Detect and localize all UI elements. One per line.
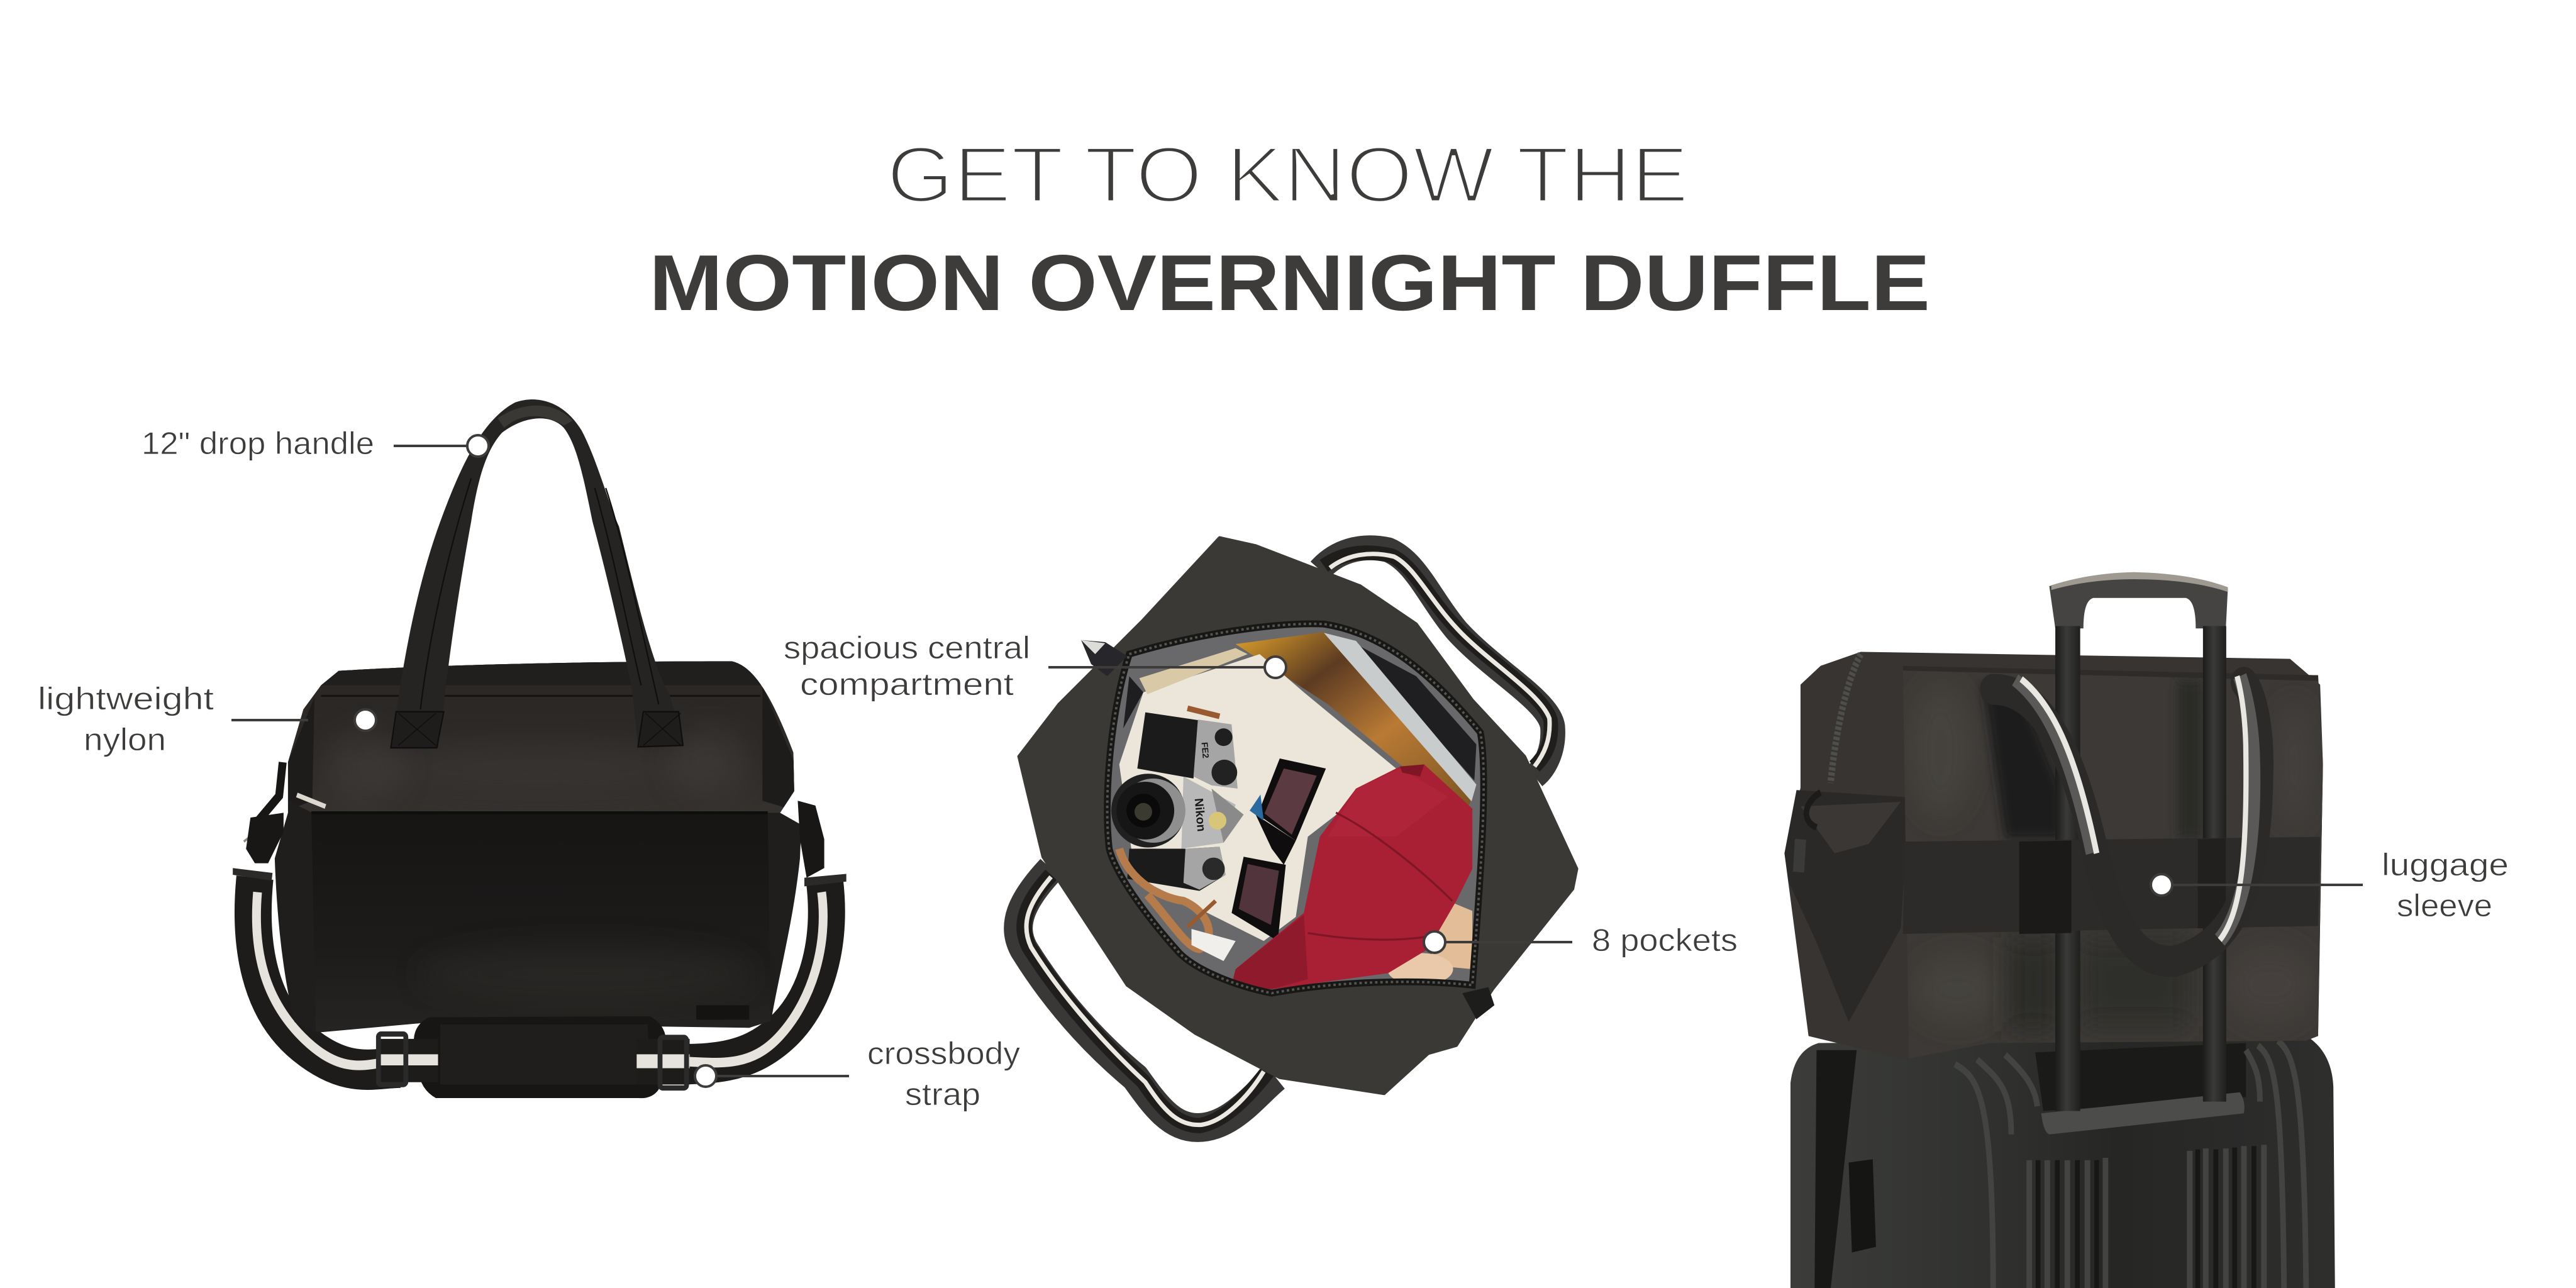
camera: FE2 — [1199, 741, 1211, 759]
callout: 12" drop handle: 12" drop handle — [142, 426, 374, 461]
callout: crossbody strap: crossbody — [867, 1036, 1020, 1071]
callout: crossbody strap — [695, 1036, 1020, 1112]
compacts — [1387, 901, 1472, 985]
drop handles — [391, 399, 683, 748]
lower pocket — [311, 813, 770, 1031]
callout: crossbody strap: strap — [905, 1077, 980, 1112]
callout: 8 pockets: 8 pockets — [1592, 923, 1738, 958]
upper panel — [277, 661, 807, 815]
panel: duffle front view — [233, 399, 847, 1098]
luggage sleeve — [1903, 837, 2320, 934]
crossbody strap — [253, 878, 826, 1070]
suitcase — [1790, 1038, 2335, 1288]
bag body — [275, 661, 801, 1033]
red cap — [1231, 765, 1472, 989]
callout: spacious central compartment — [784, 630, 1286, 702]
callout: luggage sleeve: sleeve — [2397, 888, 2492, 923]
callout: lightweight nylon: lightweight — [38, 681, 214, 716]
camera — [1111, 713, 1243, 891]
callout: 8 pockets — [1424, 923, 1738, 958]
callout: lightweight nylon: nylon — [84, 722, 166, 757]
camera: Nikon — [1192, 797, 1208, 832]
magazine — [1236, 632, 1477, 807]
logo emboss — [696, 1005, 749, 1019]
callout: 12" drop handle — [142, 426, 489, 461]
back panel — [1901, 663, 2326, 1062]
title line 1: GET TO KNOW THE — [887, 130, 1689, 219]
handle tabs — [391, 712, 444, 748]
zipper — [1108, 624, 1484, 993]
brush — [1140, 648, 1248, 694]
title — [649, 130, 1930, 327]
strap clips — [233, 801, 847, 886]
sunglasses — [1231, 758, 1326, 941]
callout: lightweight nylon — [38, 681, 376, 757]
shoulder strap — [1993, 676, 2260, 962]
panel: duffle open top view — [1018, 538, 1577, 1128]
dark mesh corner — [1123, 676, 1143, 728]
side pocket — [1784, 790, 1906, 1022]
shoulder pad — [414, 1016, 666, 1098]
telescopic handle — [2049, 572, 2228, 1111]
rope strap — [1119, 849, 1209, 949]
panel: duffle on luggage — [1784, 572, 2335, 1288]
callout: spacious central compartment: compartment — [800, 667, 1014, 702]
zipper pulls — [1081, 640, 1494, 1019]
bag shell — [1019, 538, 1577, 1094]
buckles — [379, 1034, 687, 1088]
title line 2: MOTION OVERNIGHT DUFFLE — [649, 238, 1930, 327]
side zipper and pull — [255, 762, 282, 824]
interior lining — [1108, 624, 1484, 993]
callout: luggage sleeve: luggage — [2382, 847, 2509, 882]
callout: luggage sleeve — [2151, 847, 2509, 923]
inner pocket — [1356, 644, 1477, 780]
side zipper — [1831, 654, 1861, 783]
side clip — [1799, 792, 1821, 872]
sweater — [1119, 654, 1396, 941]
strap ends by buckles — [379, 1039, 690, 1085]
callout: spacious central compartment: spacious central — [784, 630, 1030, 665]
carry handles — [1018, 548, 1553, 1128]
combination lock — [1849, 1159, 1876, 1253]
bag body — [1784, 652, 2323, 1060]
